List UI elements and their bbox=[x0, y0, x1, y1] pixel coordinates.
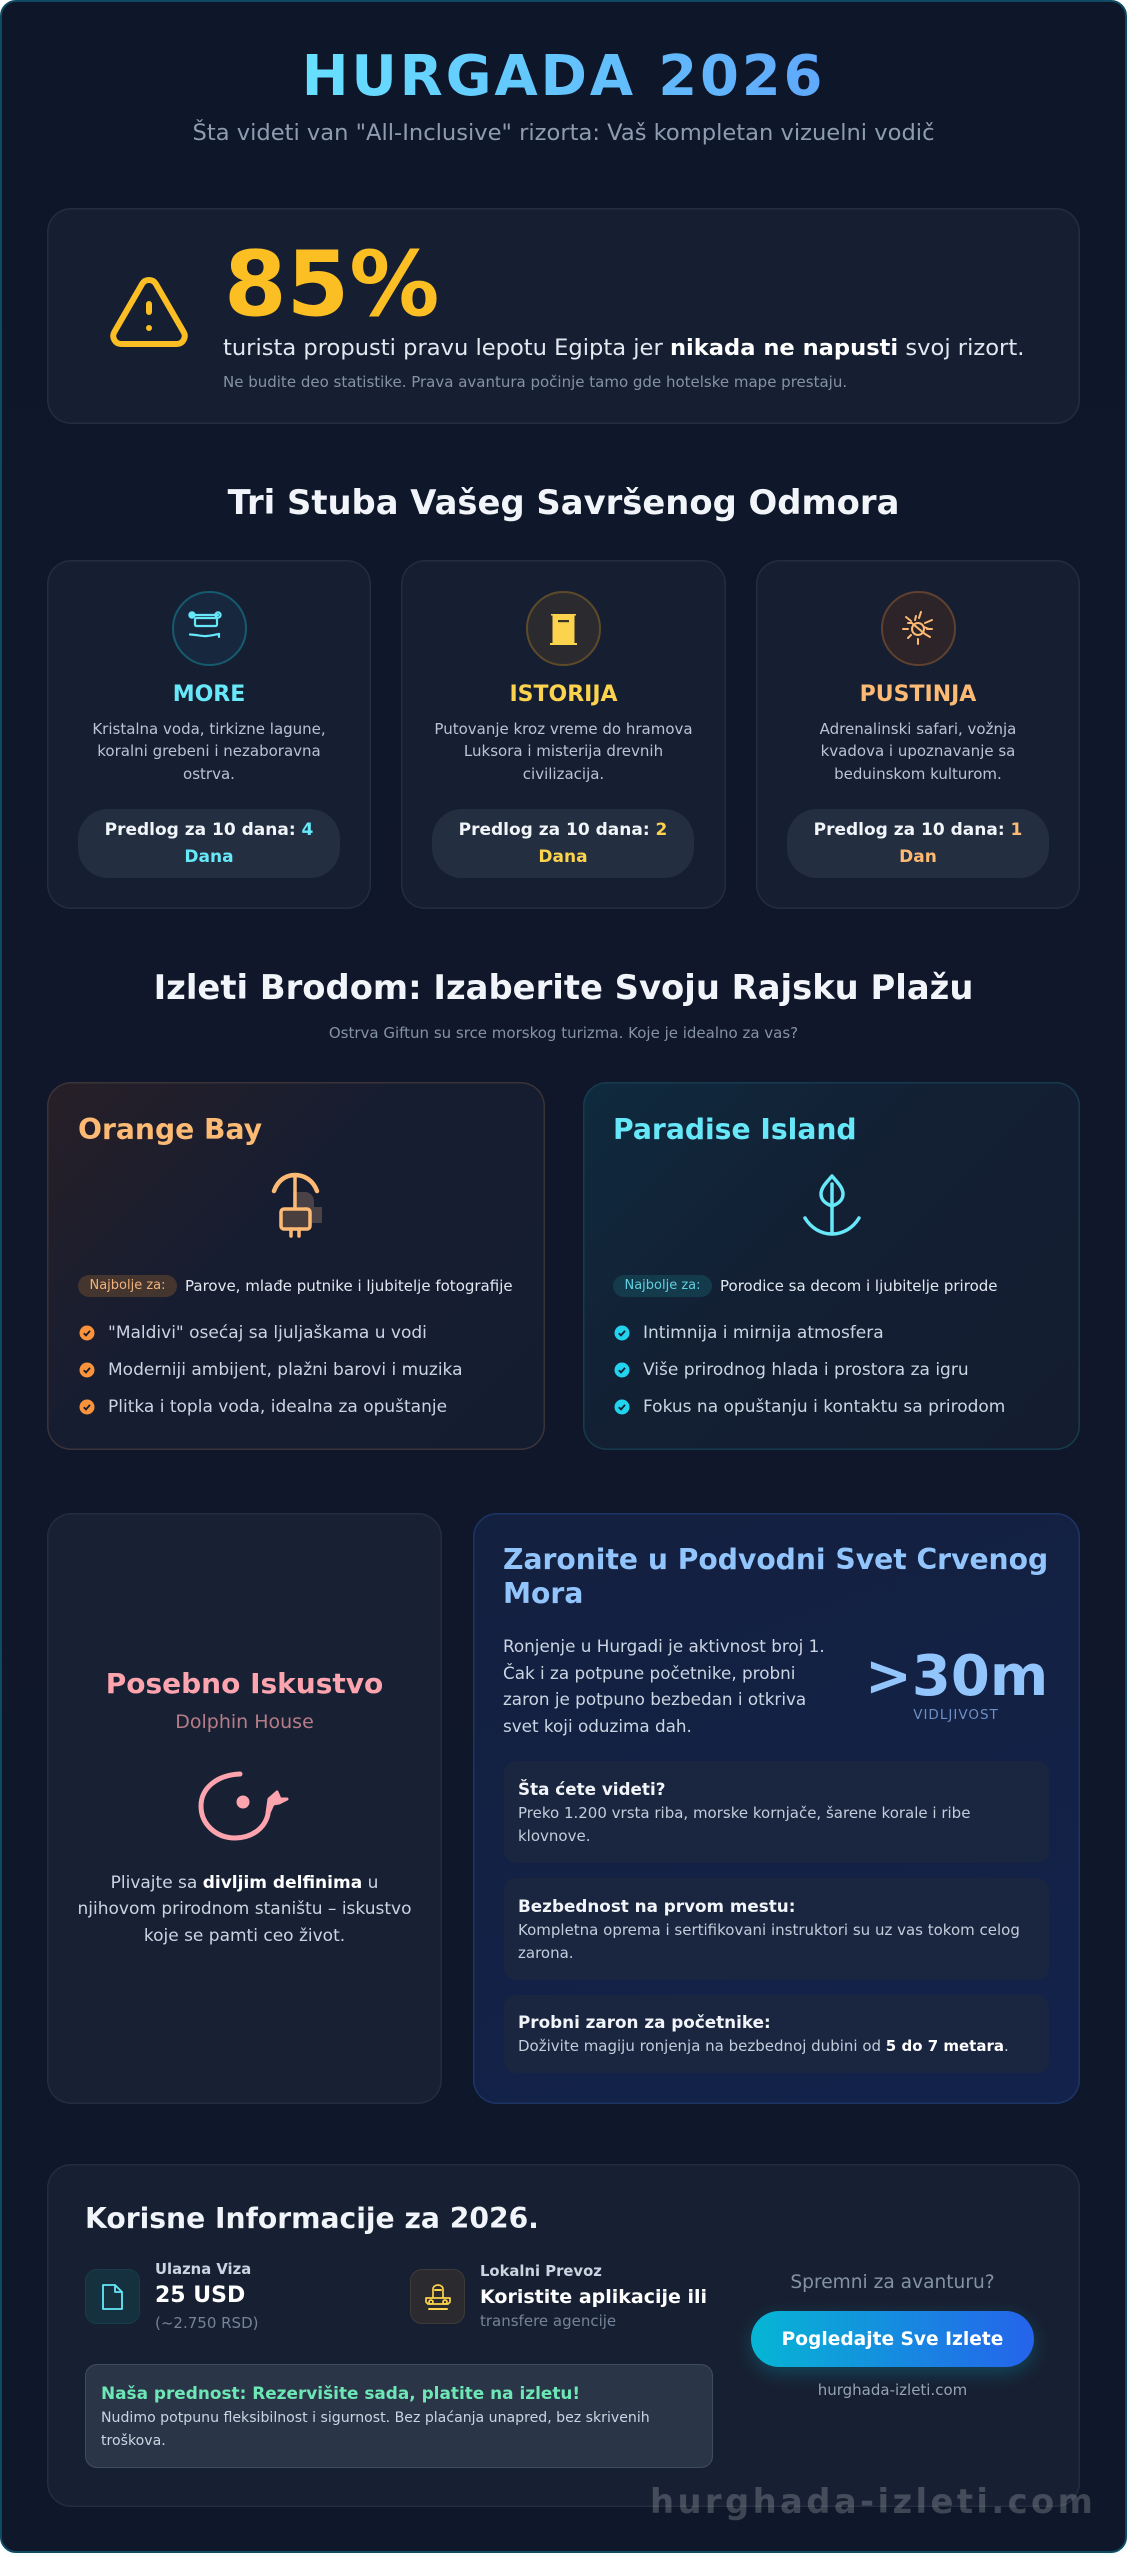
callout: pay on the trip bbox=[85, 2364, 713, 2468]
visibility label: VIDLJIVOST bbox=[913, 1707, 999, 1723]
pillar description: ostrva. bbox=[183, 765, 235, 783]
card body text bbox=[78, 1873, 411, 1946]
pillar description: Kristalna voda, tirkizne lagune, bbox=[92, 720, 326, 738]
card body text: njihovom prirodnom staništu – iskustvo bbox=[78, 1899, 411, 1919]
pillar description: civilizacija. bbox=[523, 765, 604, 783]
pillar suggestion bbox=[787, 809, 1049, 878]
card paragraph: Čak i za potpune početnike, probni bbox=[503, 1662, 795, 1682]
transport note: transfere agencije bbox=[480, 2312, 616, 2330]
statistic note: Ne budite deo statistike. Prava avantura počinje tamo gde hotelske mape prestaju. bbox=[223, 373, 847, 391]
visa label: Ulazna Viza bbox=[155, 2261, 251, 2278]
box title: Bezbednost na prvom mestu: bbox=[518, 1896, 795, 1916]
pillar suggestion: Predlog za 10 dana: 2 bbox=[459, 820, 667, 840]
pillar title: MORE bbox=[173, 682, 245, 707]
card heading: Zaronite u Podvodni Svet Crvenog bbox=[503, 1543, 1048, 1576]
info box: safety bbox=[504, 1878, 1049, 1980]
pillar description bbox=[434, 720, 693, 783]
pillar suggestion bbox=[78, 809, 340, 878]
card subtitle: Dolphin House bbox=[175, 1711, 314, 1733]
best-for badge bbox=[613, 1275, 712, 1297]
icon: desert sun bbox=[880, 590, 956, 666]
pillar description: Luksora i misterija drevnih bbox=[464, 742, 663, 760]
pillar title: PUSTINJA bbox=[860, 682, 976, 707]
big number: 85% bbox=[224, 232, 439, 337]
box text bbox=[518, 1804, 970, 1845]
callout text: Nudimo potpunu fleksibilnost i sigurnost. Bez plaćanja unapred, bez skrivenih bbox=[101, 2410, 650, 2426]
panel: orange bay bbox=[47, 1082, 545, 1450]
checklist text: Fokus na opuštanju i kontaktu sa prirodom bbox=[643, 1397, 1005, 1417]
heading: three pillars: Tri Stuba Vašeg Savršenog Odmora bbox=[228, 483, 899, 522]
box text bbox=[518, 1921, 1020, 1962]
watermark: hurghada-izleti.com bbox=[650, 2482, 1096, 2521]
pillar suggestion: Predlog za 10 dana: 1 bbox=[814, 820, 1022, 840]
card title: Orange Bay bbox=[78, 1113, 262, 1146]
pillar description: koralni grebeni i nezaboravna bbox=[97, 742, 321, 760]
checklist text: Više prirodnog hlada i prostora za igru bbox=[643, 1360, 969, 1380]
pillar suggestion bbox=[432, 809, 694, 878]
checklist text: "Maldivi" osećaj sa ljuljaškama u vodi bbox=[108, 1323, 427, 1343]
call-to-action button bbox=[751, 2311, 1034, 2367]
visa conversion: (~2.750 RSD) bbox=[155, 2314, 258, 2332]
panel: paradise island bbox=[583, 1082, 1080, 1450]
card body text: koje se pamti ceo život. bbox=[144, 1926, 345, 1946]
card paragraph: svet koji oduzima dah. bbox=[503, 1716, 692, 1736]
info box: what you will see bbox=[504, 1761, 1049, 1863]
box text: klovnove. bbox=[518, 1827, 590, 1845]
best-for badge: Najbolje za: bbox=[624, 1278, 701, 1293]
icon: ancient column bbox=[526, 590, 600, 666]
pillar description: kvadova i upoznavanje sa bbox=[821, 742, 1015, 760]
checklist item bbox=[80, 1362, 94, 1378]
callout title: Naša prednost: Rezervišite sada, platite na izletu! bbox=[101, 2383, 580, 2403]
website link: hurghada-izleti.com bbox=[818, 2381, 967, 2399]
pillar description bbox=[820, 720, 1016, 783]
checklist text: Moderniji ambijent, plažni barovi i muzika bbox=[108, 1360, 463, 1380]
pillar suggestion: Predlog za 10 dana: 4 bbox=[105, 820, 313, 840]
pillar suggestion: Dan bbox=[899, 846, 937, 866]
transport label: Lokalni Prevoz bbox=[480, 2263, 602, 2280]
panel: dolphin house bbox=[47, 1513, 442, 2104]
visa value: 25 USD bbox=[155, 2283, 245, 2308]
card title: Paradise Island bbox=[613, 1113, 857, 1146]
panel: 85% statistic bbox=[47, 208, 1080, 424]
checklist item bbox=[614, 1400, 630, 1414]
boat trips subtitle: Ostrva Giftun su srce morskog turizma. Koje je idealno za vas? bbox=[329, 1024, 798, 1042]
icon: palm anchor bbox=[803, 1174, 861, 1236]
icon: car bbox=[410, 2269, 465, 2324]
section heading: Korisne Informacije za 2026. bbox=[85, 2202, 539, 2235]
title: HURGADA 2026 bbox=[302, 44, 825, 109]
icon: beach umbrella bbox=[272, 1172, 322, 1238]
panel: diving bbox=[473, 1513, 1080, 2104]
transport value: Koristite aplikacije ili bbox=[480, 2286, 707, 2308]
checklist item bbox=[80, 1400, 94, 1414]
icon: visa document bbox=[85, 2269, 140, 2324]
pillar description: beduinskom kulturom. bbox=[834, 765, 1002, 783]
info box: trial dive bbox=[504, 1995, 1049, 2073]
box text: Doživite magiju ronjenja na bezbednoj dubini od 5 do 7 metara. bbox=[518, 2037, 1009, 2055]
box text: Preko 1.200 vrsta riba, morske kornjače, šarene korale i ribe bbox=[518, 1804, 970, 1822]
pillar description: Putovanje kroz vreme do hramova bbox=[434, 720, 693, 738]
box title: Probni zaron za početnike: bbox=[518, 2012, 771, 2032]
best-for badge: Najbolje za: bbox=[89, 1278, 166, 1293]
icon: dolphin bbox=[198, 1772, 288, 1840]
checklist item bbox=[80, 1326, 94, 1340]
title bbox=[0, 43, 1127, 111]
call-to-action prompt: Spremni za avanturu? bbox=[790, 2272, 995, 2293]
checklist item bbox=[614, 1326, 630, 1340]
best-for badge bbox=[78, 1275, 177, 1297]
card heading: Mora bbox=[503, 1577, 583, 1610]
pillar suggestion: Dana bbox=[184, 846, 234, 866]
box text: Kompletna oprema i sertifikovani instruktori su uz vas tokom celog bbox=[518, 1921, 1020, 1939]
card body text: Plivajte sa divljim delfinima u bbox=[111, 1873, 378, 1893]
panel: pustinja bbox=[756, 560, 1080, 909]
best-for text: Parove, mlađe putnike i ljubitelje fotografije bbox=[185, 1277, 513, 1295]
pillar title: ISTORIJA bbox=[509, 682, 618, 707]
card paragraph: zaron je potpuno bezbedan i otkriva bbox=[503, 1689, 806, 1709]
box title: Šta ćete videti? bbox=[518, 1779, 665, 1799]
panel: more bbox=[47, 560, 371, 909]
panel: useful information bbox=[47, 2164, 1080, 2507]
statistic sentence: turista propusti pravu lepotu Egipta jer nikada ne napusti svoj rizort. bbox=[223, 335, 1024, 361]
icon: boat on water bbox=[172, 590, 246, 666]
card heading bbox=[503, 1543, 1048, 1610]
callout text: troškova. bbox=[101, 2433, 166, 2449]
icon: warning triangle bbox=[110, 277, 188, 347]
subtitle: Šta videti van "All-Inclusive" rizorta: Vaš kompletan vizuelni vodič bbox=[192, 120, 934, 146]
call-to-action button: Pogledajte Sve Izlete bbox=[782, 2329, 1003, 2350]
pillar description bbox=[92, 720, 326, 783]
card paragraph bbox=[503, 1636, 825, 1736]
box text: zarona. bbox=[518, 1944, 574, 1962]
checklist text: Plitka i topla voda, idealna za opuštanje bbox=[108, 1397, 447, 1417]
best-for text: Porodice sa decom i ljubitelje prirode bbox=[720, 1277, 998, 1295]
pillar suggestion: Dana bbox=[538, 846, 588, 866]
callout text bbox=[101, 2410, 650, 2449]
visibility stat: >30m bbox=[865, 1644, 1048, 1709]
panel: istorija bbox=[401, 560, 726, 909]
card paragraph: Ronjenje u Hurgadi je aktivnost broj 1. bbox=[503, 1636, 825, 1656]
checklist text: Intimnija i mirnija atmosfera bbox=[643, 1323, 884, 1343]
checklist item bbox=[614, 1362, 630, 1378]
pillar description: Adrenalinski safari, vožnja bbox=[820, 720, 1016, 738]
card title: Posebno Iskustvo bbox=[106, 1667, 383, 1700]
heading: boat trips: Izleti Brodom: Izaberite Svoju Rajsku Plažu bbox=[154, 968, 973, 1007]
